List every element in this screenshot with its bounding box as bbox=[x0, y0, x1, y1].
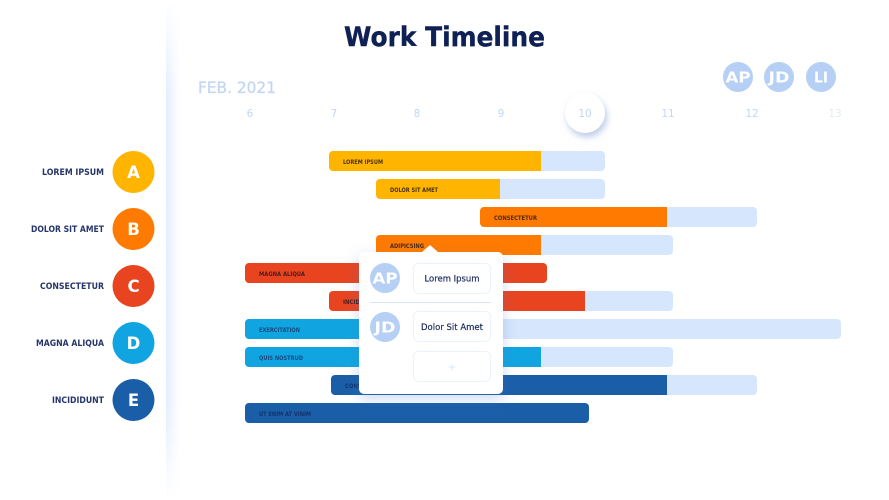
date axis: 10 bbox=[578, 108, 592, 120]
timeline bars: UT ENIM AT VINIM bbox=[259, 411, 311, 418]
date axis bbox=[247, 108, 842, 120]
popup card bbox=[359, 245, 503, 394]
date axis: 8 bbox=[414, 108, 420, 120]
date axis: 11 bbox=[661, 108, 675, 120]
category legend: C bbox=[127, 277, 140, 296]
add button: + bbox=[447, 360, 457, 374]
current date highlight bbox=[565, 93, 605, 133]
assignee: AP bbox=[370, 263, 490, 294]
category legend: DOLOR SIT AMET bbox=[31, 224, 104, 234]
category legend: D bbox=[127, 334, 140, 353]
assignee: JD: Dolor Sit Amet bbox=[421, 323, 483, 333]
timeline bars: ADIPICSING bbox=[390, 243, 424, 250]
timeline bars: CONSECTETUR bbox=[494, 215, 537, 222]
assignee: JD: JD bbox=[373, 318, 396, 336]
timeline bars bbox=[245, 151, 841, 423]
date axis: 7 bbox=[331, 108, 337, 120]
category legend: MAGNA ALIQUA bbox=[36, 338, 104, 348]
team avatars: AP bbox=[726, 68, 750, 86]
category legend bbox=[31, 151, 154, 421]
date axis: 6 bbox=[247, 108, 254, 120]
timeline bars: INCIDIDUNT bbox=[343, 299, 380, 306]
assignee: JD bbox=[370, 312, 490, 342]
add button bbox=[414, 352, 490, 382]
category legend: B bbox=[127, 220, 140, 239]
category legend: LOREM IPSUM bbox=[42, 167, 104, 177]
team avatars bbox=[723, 62, 836, 92]
timeline bars: DOLOR SIT AMET bbox=[390, 187, 439, 194]
category legend: A bbox=[127, 163, 140, 182]
team avatars: LI bbox=[814, 68, 828, 86]
assignee: AP: Lorem Ipsum bbox=[424, 274, 480, 284]
timeline bars: LOREM IPSUM bbox=[343, 159, 383, 166]
team avatars: JD bbox=[767, 68, 790, 86]
month label: FEB. 2021 bbox=[198, 78, 276, 97]
category legend: E bbox=[128, 391, 139, 410]
category legend: INCIDIDUNT bbox=[52, 395, 104, 405]
assignee: AP: AP bbox=[372, 270, 398, 288]
title: Work Timeline bbox=[344, 22, 545, 53]
timeline bars: MAGNA ALIQUA bbox=[259, 271, 305, 278]
timeline bars: QUIS NOSTRUD bbox=[259, 355, 303, 362]
timeline bars: CONSECTETUR bbox=[345, 383, 388, 390]
date axis: 9 bbox=[498, 108, 504, 120]
date axis: 13 bbox=[828, 108, 842, 120]
category legend: CONSECTETUR bbox=[40, 281, 105, 291]
date axis: 12 bbox=[745, 108, 759, 120]
timeline bars: EXERCITATION bbox=[259, 327, 300, 334]
